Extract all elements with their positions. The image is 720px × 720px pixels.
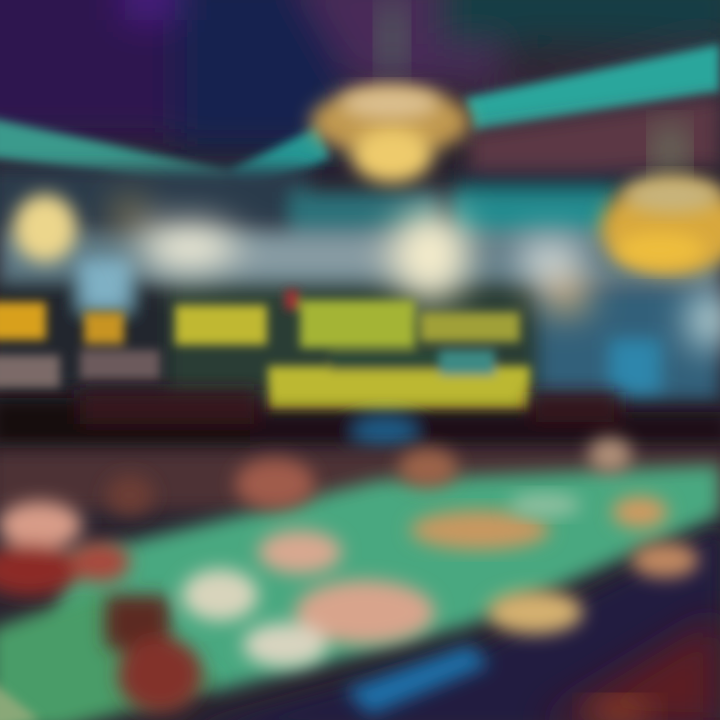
mid band behind lights [0, 98, 720, 400]
chandelier right [600, 125, 720, 274]
green felt [0, 465, 720, 720]
table rail [190, 530, 720, 720]
chips [0, 437, 699, 713]
table edge [0, 450, 720, 510]
left lamp [13, 194, 77, 262]
chandelier centre [310, 0, 470, 183]
ceiling [0, 0, 720, 150]
teal ceiling band [0, 44, 720, 200]
dark band [0, 390, 720, 448]
white lights [112, 197, 720, 345]
orange signs left [0, 302, 160, 389]
yellow sign [175, 290, 530, 412]
